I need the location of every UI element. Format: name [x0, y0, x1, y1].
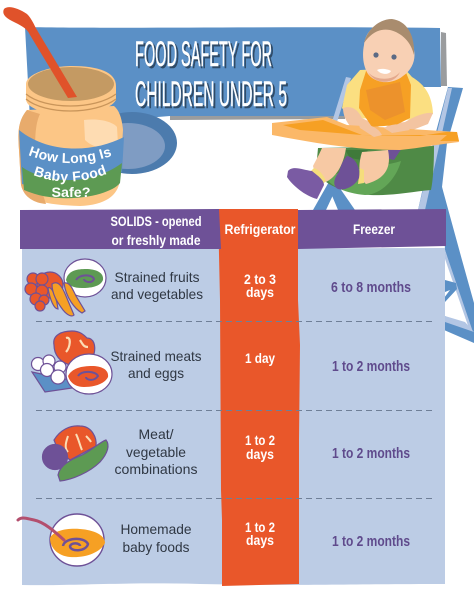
refrigerator values: 1 to 2: [245, 432, 275, 448]
arms: [343, 107, 386, 137]
infographic: FOOD SAFETY FOR: [137, 37, 274, 76]
freezer values: 6 to 8 months: [331, 280, 411, 296]
icon: meat and eggs: [32, 331, 112, 394]
text: strained meats and eggs: Strained meats: [110, 348, 202, 364]
freezer values: [331, 280, 411, 550]
icon: meat and vegetable: [42, 426, 108, 481]
text: strained meats and eggs: and eggs: [128, 365, 184, 381]
title banner: [25, 27, 447, 120]
baby: [272, 19, 459, 199]
plate: [87, 112, 177, 174]
text: meat/vegetable combinations: combinations: [114, 461, 198, 477]
table background: [22, 248, 445, 585]
freezer values: 1 to 2 months: [332, 446, 410, 462]
solids header: [20, 209, 221, 249]
text: meat/vegetable combinations: Meat/: [138, 426, 174, 442]
freezer values: 1 to 2 months: [332, 359, 410, 375]
refrigerator values: days: [246, 446, 274, 462]
icon: homemade baby food bowl: [18, 514, 105, 566]
freezer values: 1 to 2 months: [332, 534, 410, 550]
infographic: CHILDREN UNDER 5: [137, 77, 289, 116]
solids header: SOLIDS - opened: [110, 213, 202, 229]
jar label text: [28, 146, 112, 200]
solids header: or freshly made: [112, 232, 201, 248]
infographic: CHILDREN UNDER 5: [135, 75, 287, 114]
tray: [272, 117, 459, 150]
hands: [358, 122, 410, 137]
icon: fruits and vegetables: [25, 259, 106, 316]
refrigerator column: Refrigerator: [224, 221, 296, 237]
jar label text: How Long Is: [28, 146, 112, 164]
green seat: [316, 146, 434, 195]
shirt: [342, 68, 433, 120]
jar label text: Safe?: [52, 184, 90, 200]
head: [363, 22, 415, 82]
refrigerator values: 2 to 3: [244, 271, 276, 287]
infographic: FOOD SAFETY FOR: [135, 35, 272, 74]
baby food jar: [18, 66, 124, 206]
title: [135, 35, 289, 116]
bib: [359, 68, 411, 127]
text: meat/vegetable combinations: vegetable: [126, 444, 186, 460]
jar label text: Baby Food: [34, 164, 106, 184]
high chair frame: [313, 77, 474, 343]
text: strained fruits and vegetables: Strained fruits: [114, 269, 200, 285]
text: homemade baby foods: Homemade: [120, 521, 192, 537]
freezer header: [298, 209, 446, 249]
freezer header: Freezer: [353, 221, 395, 237]
text: strained fruits and vegetables: and vegetables: [111, 286, 203, 302]
refrigerator values: days: [246, 284, 274, 300]
refrigerator values: [244, 271, 276, 548]
refrigerator column: [218, 209, 300, 586]
socks: [287, 168, 324, 199]
row dividers: [36, 322, 436, 498]
refrigerator values: days: [246, 532, 274, 548]
text: homemade baby foods: baby foods: [122, 539, 190, 555]
refrigerator values: 1 to 2: [245, 519, 275, 535]
refrigerator values: 1 day: [245, 350, 275, 366]
legs: [313, 148, 346, 182]
spoon: [3, 7, 77, 98]
